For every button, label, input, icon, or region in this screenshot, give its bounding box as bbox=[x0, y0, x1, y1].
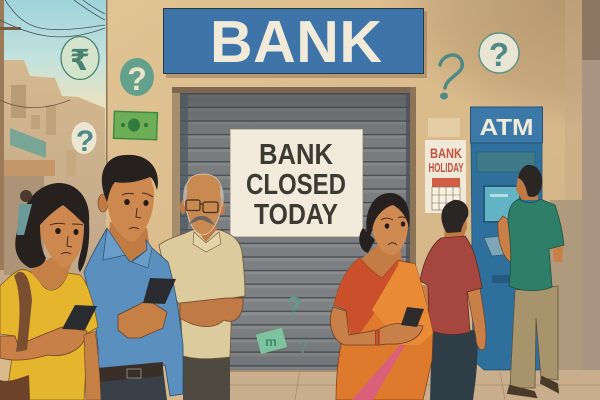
question bubble: pale bbox=[72, 122, 96, 158]
rupee icon: ₹ bbox=[70, 43, 90, 77]
person: woman in orange saree bbox=[330, 193, 433, 400]
faded floating money on shutter: ? bbox=[286, 291, 302, 321]
closed shutter bbox=[172, 87, 416, 372]
faded floating money on shutter: m bbox=[265, 334, 277, 349]
banknote icon bbox=[114, 111, 157, 140]
person: older man with glasses bbox=[159, 174, 245, 400]
notice: bank closed today: TODAY bbox=[254, 199, 338, 231]
rupee icon bbox=[61, 36, 99, 80]
question bubble: pale: ? bbox=[76, 125, 94, 158]
person: distant pedestrian bbox=[17, 190, 32, 235]
notice: bank closed today bbox=[230, 130, 362, 236]
poster: bank holiday: BANK bbox=[430, 145, 462, 161]
floor pavement bbox=[230, 370, 600, 400]
person: green shirt man at ATM bbox=[498, 165, 564, 397]
background: sky and street buildings bbox=[0, 0, 107, 300]
person: red shirt man bbox=[420, 200, 486, 400]
person: man in blue shirt bbox=[84, 155, 183, 400]
ATM machine: ATM bbox=[480, 114, 534, 140]
poster: bank holiday: HOLIDAY bbox=[428, 160, 464, 175]
floating question mark bbox=[440, 55, 462, 100]
question bubble: teal: ? bbox=[127, 61, 147, 97]
ATM machine bbox=[470, 107, 542, 370]
bank sign bbox=[164, 8, 427, 78]
person: woman in yellow shirt bbox=[0, 183, 101, 400]
poster: bank holiday bbox=[425, 118, 466, 213]
bank sign: BANK bbox=[210, 9, 382, 75]
question bubble: right: ? bbox=[489, 36, 509, 73]
faded floating money on shutter: ? bbox=[297, 337, 309, 358]
faded floating money on shutter bbox=[256, 291, 309, 358]
question bubble: teal bbox=[120, 58, 154, 97]
bank building wall bbox=[106, 0, 600, 375]
notice: bank closed today: BANK bbox=[259, 139, 333, 171]
notice: bank closed today: CLOSED bbox=[246, 169, 346, 201]
question bubble: right bbox=[479, 33, 519, 73]
